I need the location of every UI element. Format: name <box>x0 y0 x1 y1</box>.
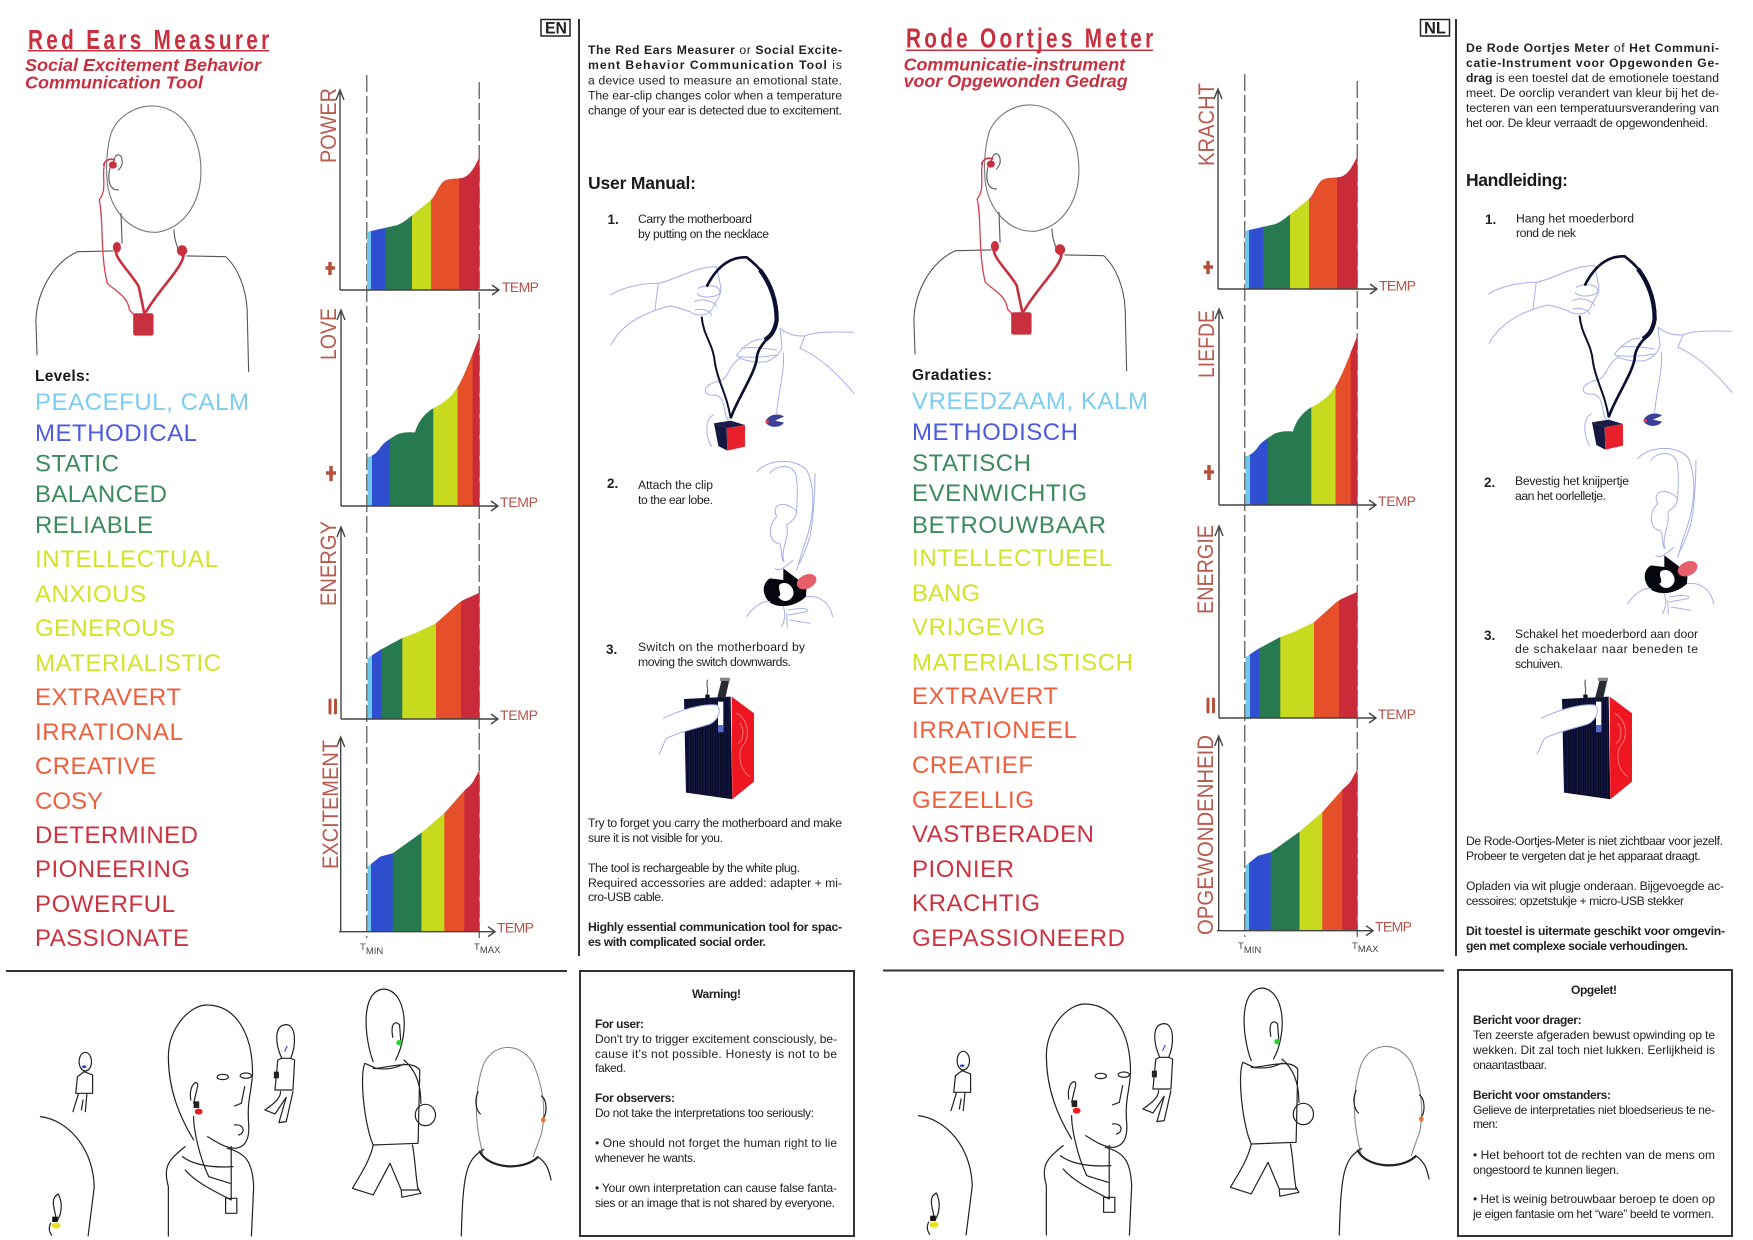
levels list: PIONEERING <box>35 856 190 883</box>
chart: kracht: KRACHT <box>1194 83 1219 166</box>
divider: Dutch bottom rule <box>883 970 1444 972</box>
step 3 text: schuiven. <box>1515 657 1563 671</box>
temperature limit guides <box>1245 74 1357 937</box>
panel: Dutch warning box: Opgelet! <box>1571 983 1617 997</box>
panel: English user manual <box>588 43 854 949</box>
intro text: a device used to measure an emotional state. <box>588 73 842 87</box>
levels list: PEACEFUL, CALM <box>35 389 249 416</box>
step 2 text <box>1484 474 1629 503</box>
panel: English warning box: Do not take the interpretations too seriously: <box>595 1106 814 1120</box>
subtitle: Communication Tool <box>25 73 204 93</box>
intro text: meet. De oorclip verandert van kleur bij het de- <box>1466 86 1719 100</box>
step 2 text: aan het oorlelletje. <box>1515 489 1606 503</box>
levels list: CREATIVE <box>35 753 156 780</box>
panel: English warning box: For user: <box>595 1017 644 1031</box>
panel: Dutch warning box: onaantastbaar. <box>1473 1058 1547 1072</box>
levels list: BETROUWBAAR <box>912 512 1106 539</box>
title: Red Ears Measurer <box>28 25 270 56</box>
chart: kracht <box>1194 83 1416 294</box>
intro text <box>1466 41 1719 130</box>
levels list: EXTRAVERT <box>35 684 181 711</box>
closing notes: Dit toestel is uitermate geschikt voor omgevin- <box>1466 924 1725 938</box>
panel: Dutch warning box <box>1458 970 1732 1236</box>
subtitle: Communicatie-instrument <box>904 55 1126 75</box>
levels list: INTELLECTUEEL <box>912 545 1112 572</box>
step 1 text: Carry the motherboard <box>638 212 752 226</box>
title: Rode Oortjes Meter <box>906 24 1154 55</box>
closing notes: Probeer te vergeten dat je het apparaat draagt. <box>1466 849 1701 863</box>
step 2 text <box>607 476 713 507</box>
levels list: ANXIOUS <box>35 581 146 608</box>
chart: energy: TEMP <box>500 707 538 723</box>
levels list: VRIJGEVIG <box>912 614 1045 641</box>
levels list: EXTRAVERT <box>912 683 1058 710</box>
subtitle: Social Excitement Behavior <box>25 55 262 75</box>
illustration: necklace in hands <box>611 257 854 451</box>
step 2 text: 2. <box>607 476 618 491</box>
illustration: necklace in hands <box>1489 256 1732 450</box>
illustration: motherboard switch <box>1537 678 1632 799</box>
chart: opgewondenheid: MIN <box>1244 945 1261 956</box>
chart: energy <box>316 521 538 724</box>
levels list: POWERFUL <box>35 891 175 918</box>
divider: English columns <box>578 19 580 956</box>
levels list: RELIABLE <box>35 512 153 539</box>
chart: liefde: LIEFDE <box>1194 310 1219 378</box>
levels list: STATIC <box>35 450 119 478</box>
illustration: motherboard switch <box>659 678 754 799</box>
levels list: IRRATIONAL <box>35 719 183 746</box>
panel: Dutch warning box: men: <box>1473 1117 1498 1131</box>
step 2 text: 2. <box>1484 475 1495 490</box>
intro text <box>588 43 842 117</box>
panel: Dutch warning box: Bericht voor drager: <box>1473 1013 1582 1027</box>
levels list: VASTBERADEN <box>912 821 1094 848</box>
intro text: De Rode Oortjes Meter of Het Communi- <box>1466 41 1719 55</box>
chart: excitement: T <box>474 942 480 953</box>
subtitle <box>25 55 262 93</box>
chart: liefde <box>1194 309 1416 510</box>
closing notes: Opladen via wit plugje onderaan. Bijgevoegde ac- <box>1466 879 1724 893</box>
chart: opgewondenheid: T <box>1352 941 1358 952</box>
chart: energie: ENERGIE <box>1193 525 1218 614</box>
closing notes <box>588 816 842 949</box>
illustration: clip on ear <box>1628 448 1714 614</box>
chart: power <box>316 88 539 295</box>
closing notes: Highly essential communication tool for spac- <box>588 920 842 934</box>
chart: energie <box>1193 525 1416 723</box>
levels list: BANG <box>912 580 980 607</box>
levels list: INTELLECTUAL <box>35 546 218 573</box>
closing notes: gen met complexe sociale verhoudingen. <box>1466 939 1688 953</box>
panel: English explanation <box>25 18 570 957</box>
panel: Dutch explanation <box>904 18 1450 956</box>
levels list: PIONIER <box>912 856 1014 883</box>
levels list: EVENWICHTIG <box>912 480 1087 507</box>
levels list: GEZELLIG <box>912 787 1034 814</box>
step 3 text <box>606 640 806 669</box>
title underline <box>906 50 1153 51</box>
step 3 text <box>1484 627 1698 671</box>
closing notes: Try to forget you carry the motherboard and make <box>588 816 842 830</box>
intro text: catie-Instrument voor Opgewonden Ge- <box>1466 56 1719 70</box>
step 2 text: to the ear lobe. <box>638 493 713 507</box>
chart: energy: ENERGY <box>316 521 341 606</box>
panel: English warning box: cause it's not possible. Honesty is not to be <box>595 1047 837 1061</box>
chart: excitement: MAX <box>480 945 501 956</box>
chart: opgewondenheid <box>1193 735 1412 956</box>
step 3 text: 3. <box>1484 628 1495 643</box>
chart: opgewondenheid: OPGEWONDENHEID <box>1193 735 1218 935</box>
subtitle <box>904 55 1128 91</box>
panel: English warning box: Don't try to trigger excitement consciously, be- <box>595 1032 837 1046</box>
chart: excitement: TEMP <box>497 920 534 936</box>
intro text: het oor. De kleur verraadt de opgewondenheid. <box>1466 116 1708 130</box>
step 3 text: Switch on the motherboard by <box>638 640 806 654</box>
panel: English warning box: faked. <box>595 1061 626 1075</box>
step 1 text: rond de nek <box>1516 226 1577 240</box>
closing notes: The tool is rechargeable by the white plug. <box>588 861 800 875</box>
levels list: METHODICAL <box>35 420 197 447</box>
step 2 text: Bevestig het knijpertje <box>1515 474 1629 488</box>
step 3 text: de schakelaar naar beneden te <box>1515 642 1698 656</box>
levels list: MATERIALISTISCH <box>912 650 1133 676</box>
chart: love: LOVE <box>316 308 341 360</box>
levels list: PASSIONATE <box>35 925 189 952</box>
chart: power: TEMP <box>502 279 539 295</box>
closing notes: Required accessories are added: adapter + mi- <box>588 876 842 890</box>
step 1 text: 1. <box>608 212 619 227</box>
levels list: STATISCH <box>912 450 1031 477</box>
chart: power: POWER <box>316 88 341 163</box>
step 1 text: 1. <box>1485 212 1496 227</box>
chart: excitement <box>318 737 534 957</box>
step 3 text: moving the switch downwards. <box>638 655 791 669</box>
temperature limit guides <box>367 75 479 938</box>
panel: Dutch warning box: je eigen fantasie om het “ware” beeld te vormen. <box>1472 1207 1714 1221</box>
chart: energie: TEMP <box>1378 706 1416 722</box>
chart: love: TEMP <box>500 494 538 510</box>
divider: English bottom rule <box>6 970 567 972</box>
chart: liefde: TEMP <box>1378 493 1416 509</box>
levels list: BALANCED <box>35 481 167 508</box>
levels list: GENEROUS <box>35 615 175 642</box>
chart: love <box>316 308 538 511</box>
panel: Dutch warning box: • Het is weinig betrouwbaar beroep te doen op <box>1473 1192 1715 1206</box>
panel: Dutch warning box: Gelieve de interpretaties niet bloedserieus te ne- <box>1473 1103 1715 1117</box>
levels list <box>912 367 1148 952</box>
levels list: DETERMINED <box>35 822 198 849</box>
chart: opgewondenheid: T <box>1238 941 1244 952</box>
levels list: Levels: <box>35 368 90 385</box>
levels list: CREATIEF <box>912 752 1033 779</box>
chart: opgewondenheid: TEMP <box>1375 918 1412 934</box>
chart: excitement: MIN <box>366 946 383 957</box>
intro text: tecteren van een temperatuursverandering van <box>1466 101 1719 115</box>
intro text: change of your ear is detected due to excitement. <box>588 103 842 117</box>
levels list: COSY <box>35 788 103 815</box>
chart: excitement: EXCITEMENT <box>318 740 343 869</box>
step 1 text: by putting on the necklace <box>638 227 769 241</box>
panel: English warning box: • Your own interpretation can cause false fanta- <box>595 1181 837 1195</box>
closing notes: De Rode-Oortjes-Meter is niet zichtbaar voor jezelf. <box>1466 834 1723 848</box>
step 1 text <box>1485 212 1634 240</box>
panel: English warning box: Warning! <box>692 987 741 1001</box>
heading: handleiding: Handleiding: <box>1466 170 1568 190</box>
levels list: METHODISCH <box>912 419 1078 446</box>
levels list: IRRATIONEEL <box>912 717 1077 744</box>
closing notes <box>1466 834 1725 953</box>
levels list: GEPASSIONEERD <box>912 925 1125 952</box>
levels list <box>35 368 249 952</box>
chart: kracht: TEMP <box>1379 278 1416 294</box>
chart: opgewondenheid: MAX <box>1358 944 1379 955</box>
illustration: head with necklace <box>914 105 1127 371</box>
panel: Dutch warning box: wekken. Dit zal toch niet lukken. Eerlijkheid is <box>1472 1043 1715 1057</box>
panel: English warning box: whenever he wants. <box>594 1151 696 1165</box>
intro text: ment Behavior Communication Tool is <box>588 58 842 72</box>
levels list: Gradaties: <box>912 367 992 384</box>
panel: English warning box: For observers: <box>595 1091 675 1105</box>
step 1 text <box>608 212 769 241</box>
subtitle: voor Opgewonden Gedrag <box>904 71 1128 91</box>
step 3 text: Schakel het moederbord aan door <box>1515 627 1698 641</box>
step 3 text: 3. <box>606 642 617 657</box>
levels list: KRACHTIG <box>912 890 1040 917</box>
title underline <box>28 50 269 52</box>
step 2 text: Attach the clip <box>638 478 713 492</box>
intro text: drag is een toestel dat de emotionele toestand <box>1466 71 1719 85</box>
divider: Dutch columns <box>1455 19 1457 956</box>
levels list: VREEDZAAM, KALM <box>912 388 1148 415</box>
panel: Dutch warning box: ongestoord te kunnen liegen. <box>1473 1163 1619 1177</box>
closing notes: cro-USB cable. <box>588 890 664 904</box>
closing notes: cessoires: opzetstukje + micro-USB stekker <box>1466 894 1684 908</box>
panel: Dutch warning box: Ten zeerste afgeraden bewust opwinding op te <box>1473 1028 1715 1042</box>
panel: English warning box <box>580 971 854 1236</box>
chart: excitement: T <box>360 942 366 953</box>
panel: Dutch warning box: • Het behoort tot de rechten van de mens om <box>1473 1148 1715 1162</box>
intro text: The Red Ears Measurer or Social Excite- <box>588 43 842 57</box>
panel: English warning box: sies or an image that is not shared by everyone. <box>595 1196 835 1210</box>
panel: Dutch user manual <box>1466 41 1732 953</box>
language badge EN: EN <box>545 18 567 38</box>
intro text: The ear-clip changes color when a temperature <box>588 88 842 102</box>
levels list: MATERIALISTIC <box>35 650 221 677</box>
panel: Dutch warning box: Bericht voor omstanders: <box>1473 1088 1611 1102</box>
panel: English warning box: • One should not forget the human right to lie <box>595 1136 837 1150</box>
closing notes: es with complicated social order. <box>588 935 766 949</box>
illustration: head with necklace <box>36 106 249 372</box>
closing notes: sure it is not visible for you. <box>588 831 723 845</box>
step 1 text: Hang het moederbord <box>1516 212 1634 226</box>
illustration: people wearing the device (English) <box>40 989 551 1236</box>
illustration: people wearing the device (Dutch) <box>918 988 1429 1235</box>
illustration: clip on ear <box>747 461 833 627</box>
heading: user manual: User Manual: <box>588 173 696 193</box>
language badge NL: NL <box>1424 18 1446 38</box>
